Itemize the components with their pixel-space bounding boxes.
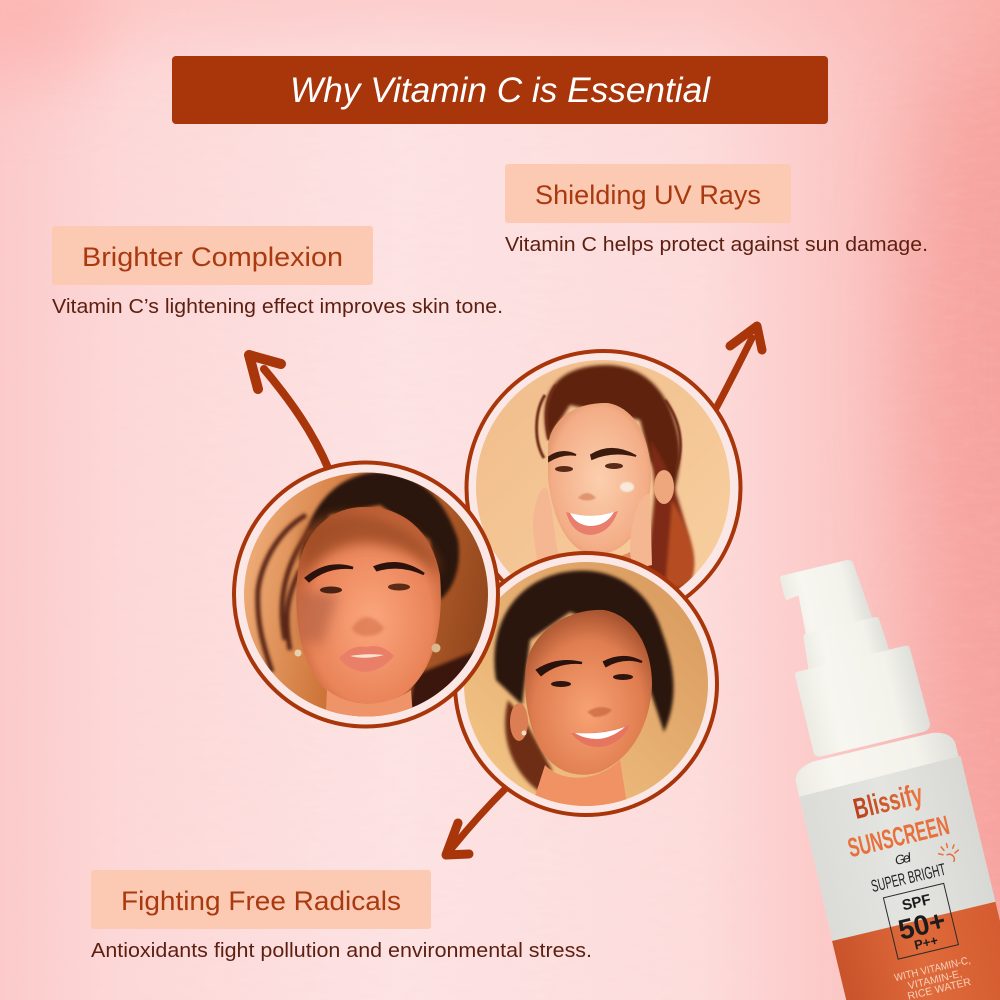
SPF badge: SPF — [900, 891, 933, 914]
title banner — [172, 56, 828, 124]
SPF badge — [883, 883, 958, 959]
label: Shielding UV Rays: Shielding UV Rays — [535, 180, 761, 210]
pump collar — [794, 644, 932, 758]
SPF badge: 50+ — [895, 905, 949, 946]
portrait: woman with glowing smile — [455, 553, 720, 815]
label: Fighting Free Radicals — [91, 870, 431, 929]
pump head — [779, 557, 874, 640]
text: ingredients: VITAMIN-E, — [907, 968, 963, 992]
title banner: Why Vitamin C is Essential — [290, 71, 711, 110]
orange band — [832, 902, 1000, 1000]
label: Fighting Free Radicals: Fighting Free Radicals — [121, 886, 401, 916]
label: Brighter Complexion: Brighter Complexion — [82, 242, 343, 272]
arrow: to Fighting Free Radicals — [446, 788, 506, 855]
portrait: woman applying cream — [466, 350, 740, 625]
label: Shielding UV Rays — [505, 164, 791, 223]
pump neck — [800, 616, 891, 675]
arrow: to Brighter Complexion — [249, 355, 329, 470]
text: Fighting Free Radicals description: Antioxidants fight pollution and environmental stress. — [91, 940, 592, 962]
text: ingredients — [893, 954, 977, 1000]
label: Brighter Complexion — [52, 226, 373, 285]
text: Shielding UV Rays description: Vitamin C helps protect against sun damage. — [505, 234, 928, 256]
text: Brighter Complexion description: Vitamin C’s lightening effect improves skin tone. — [52, 296, 503, 318]
portrait: woman with sunlit face — [234, 462, 500, 730]
text: ingredients: WITH VITAMIN-C, — [893, 954, 972, 984]
text: Gel: Gel — [893, 849, 913, 868]
product: Blissify sunscreen bottle — [746, 545, 1000, 1000]
text: SUPER BRIGHT: SUPER BRIGHT — [869, 860, 948, 896]
arrow: to Shielding UV Rays — [714, 326, 762, 412]
bottle body — [790, 728, 1000, 1000]
bottle label — [797, 756, 1000, 1000]
brand: Blissify: Blissify — [850, 778, 926, 826]
icon: sun — [937, 841, 961, 864]
SPF badge: P++ — [913, 932, 940, 953]
